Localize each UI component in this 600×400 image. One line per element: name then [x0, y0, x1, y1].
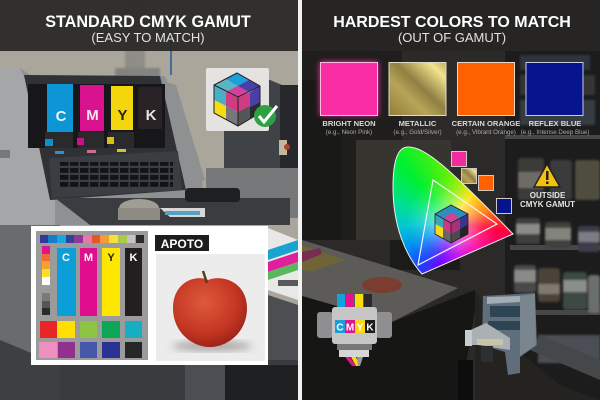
title: standard CMYK gamut: STANDARD CMYK GAMUT — [45, 13, 251, 31]
ink cartridge letters: Y — [117, 107, 128, 124]
swatch: bright neon — [320, 62, 378, 136]
chart: colour gamut diagram — [392, 146, 514, 275]
panel: right header band — [302, 0, 600, 51]
icon: printer with CMYK label: K — [366, 322, 374, 334]
icon: printer with CMYK label — [317, 294, 392, 366]
chart: CMYK colour control sheet: Y — [107, 252, 115, 264]
ink cartridge letters: C — [56, 108, 67, 125]
subtitle: out of gamut: (OUT OF GAMUT) — [398, 30, 506, 45]
swatch: metallic — [389, 62, 446, 136]
swatch: certain orange — [452, 62, 520, 136]
title: hardest colors to match: HARDEST COLORS TO MATCH — [333, 14, 571, 31]
ink cartridge letters: K — [146, 107, 157, 124]
icon: printer with CMYK label: M — [346, 322, 354, 334]
panel divider — [298, 0, 302, 400]
label: outside CMYK gamut: CMYK GAMUT — [520, 200, 575, 209]
label: APOTO: APOTO — [161, 237, 203, 251]
icon: printer with CMYK label: C — [336, 322, 344, 334]
panel: left printing press photo background — [0, 0, 300, 400]
swatch: metallic: METALLIC — [399, 119, 437, 128]
icon: warning triangle — [534, 164, 560, 187]
swatch: bright neon: BRIGHT NEON — [322, 119, 376, 128]
chart: CMYK colour control sheet: K — [130, 252, 138, 264]
image: red apple — [156, 254, 265, 361]
icon: CMYK cube with check badge — [206, 68, 277, 131]
panel: printed colour proof card — [31, 226, 268, 365]
swatch: reflex blue: REFLEX BLUE — [529, 119, 581, 128]
chart: CMYK colour control sheet — [36, 231, 148, 360]
small swatches outside gamut — [452, 152, 512, 214]
panel: right print shop photo background — [300, 0, 600, 400]
ink cartridge letters — [56, 107, 157, 125]
swatch: certain orange: CERTAIN ORANGE — [452, 119, 520, 128]
icon: printer with CMYK label: Y — [357, 322, 364, 334]
swatch: certain orange: (e.g., Vibrant Orange) — [456, 129, 516, 136]
swatch: bright neon: (e.g., Neon Pink) — [326, 129, 372, 136]
subtitle: easy to match: (EASY TO MATCH) — [91, 30, 205, 45]
swatch: metallic: (e.g., Gold/Silver) — [393, 129, 442, 136]
chart: CMYK colour control sheet: M — [84, 252, 93, 264]
chart: CMYK colour control sheet: C — [62, 252, 70, 264]
swatch: reflex blue: (e.g., Intense Deep Blue) — [521, 129, 589, 136]
label: outside CMYK gamut — [520, 191, 575, 209]
label: outside CMYK gamut: OUTSIDE — [530, 191, 566, 200]
ink cartridge letters: M — [86, 107, 99, 124]
label: APOTO — [155, 235, 209, 251]
swatch: reflex blue — [521, 62, 589, 136]
panel: left header band — [0, 0, 298, 51]
icon: offset press machine — [465, 293, 537, 375]
